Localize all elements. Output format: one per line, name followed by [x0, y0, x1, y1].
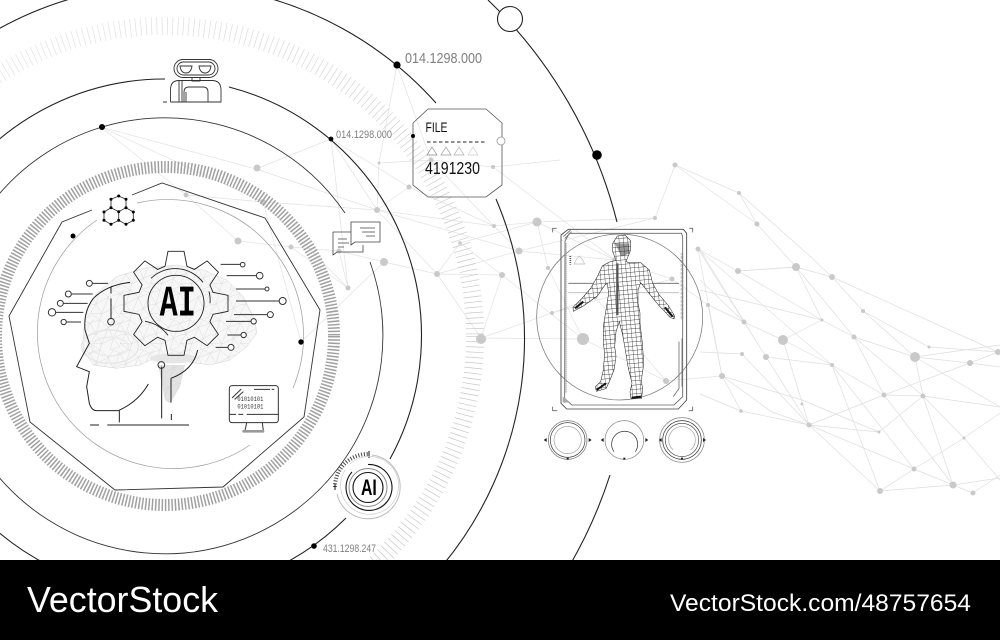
- left circuit nodes: [48, 280, 108, 325]
- inner hatched ring: [0, 167, 334, 505]
- brain wireframe: [82, 265, 257, 403]
- footer bar: [0, 560, 1000, 640]
- file number: 4191230: [425, 158, 480, 178]
- brain and head illustration: [48, 251, 286, 433]
- gauge circles: [544, 418, 706, 462]
- gear label: AI: [160, 280, 196, 329]
- file heading: FILE: [426, 120, 448, 135]
- icon: robot: [163, 60, 221, 102]
- outer hatched ring: [0, 26, 475, 640]
- scan circle: [537, 234, 703, 400]
- head outline: [77, 282, 198, 425]
- coordinate labels: 014.1298.000: [336, 129, 392, 141]
- arc nodes: [70, 61, 602, 549]
- top hollow node: [498, 6, 522, 32]
- coordinate labels: 014.1298.000: [405, 50, 482, 67]
- thin grey circle: [37, 200, 304, 469]
- icon: monitor: [229, 386, 278, 433]
- gauge 2: [601, 421, 648, 460]
- icon: chat bubbles: [333, 222, 380, 255]
- icon: monitor: 01010101: [237, 395, 263, 403]
- gauge 3: [659, 418, 706, 462]
- wireframe human: [573, 235, 675, 399]
- footer brand: VectorStock: [27, 579, 219, 620]
- coordinate labels: 431.1298.247: [323, 543, 376, 555]
- icon: monitor: 01010101: [237, 403, 263, 411]
- badge label: AI: [361, 477, 377, 501]
- panel frame: [553, 228, 693, 411]
- gear: [124, 251, 228, 355]
- AI badge: [335, 451, 400, 519]
- octagon frame: [9, 183, 320, 490]
- gauge 1: [544, 421, 592, 460]
- concentric arcs: [0, 0, 617, 593]
- right circuit nodes: [216, 262, 286, 350]
- inner circuit: [109, 287, 112, 318]
- network mesh: [101, 65, 1000, 496]
- icon: hexagon molecule: [102, 194, 135, 226]
- panel: file: [411, 109, 505, 197]
- footer url: VectorStock.com/48757654: [670, 590, 971, 617]
- human figure panel: [537, 228, 706, 462]
- coordinate labels: [323, 50, 482, 555]
